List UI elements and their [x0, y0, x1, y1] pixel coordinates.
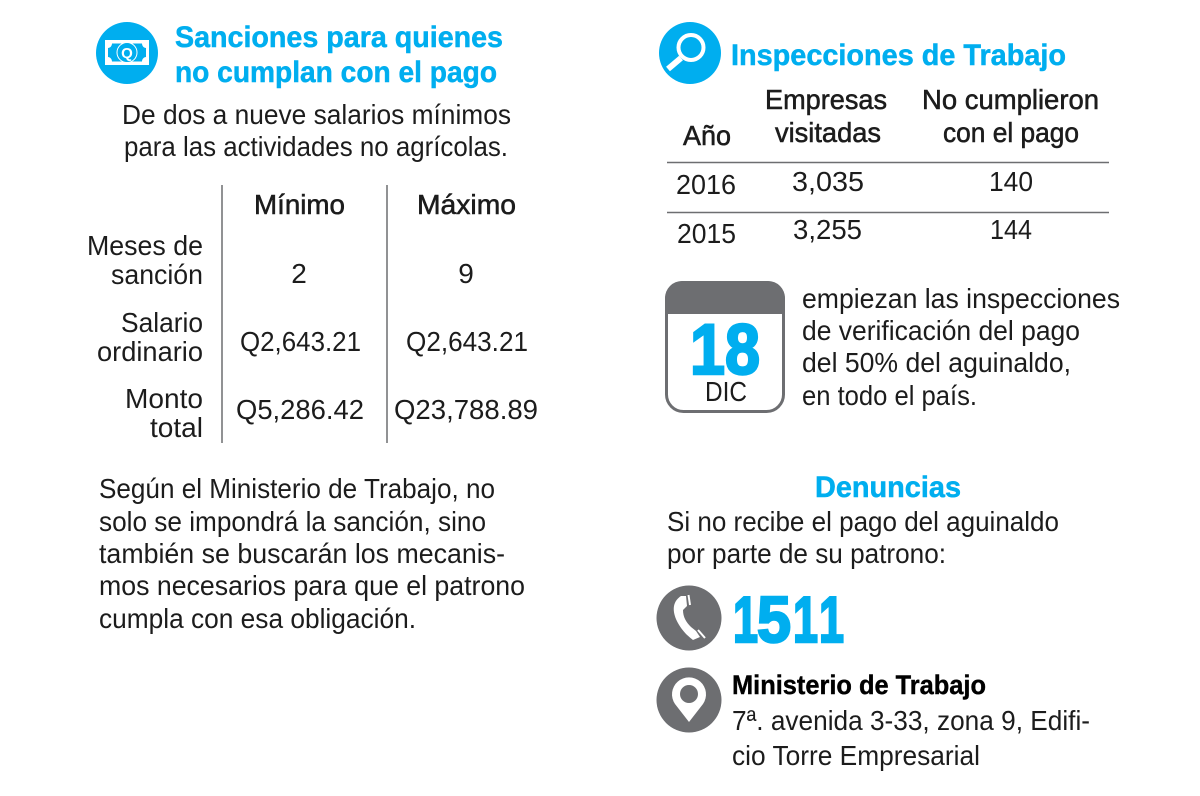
text: ministerio: [99, 473, 525, 634]
text: ministerio: mos necesarios para que el patrono: [99, 570, 525, 601]
text: inspecciones fecha: del 50% del aguinaldo,: [802, 347, 1071, 378]
table: inspecciones: Año: [683, 120, 731, 151]
icon: location pin: [656, 668, 722, 732]
text: denuncias: Si no recibe el pago del aguinaldo: [667, 506, 1059, 537]
table: inspecciones: con el pago: [943, 117, 1079, 148]
heading: denuncias: Denuncias: [815, 471, 961, 504]
table: sanciones: Salario: [121, 307, 203, 338]
table: sanciones: Q5,286.42: [236, 394, 364, 425]
icon: phone: [656, 586, 722, 650]
table: sanciones: Monto: [125, 383, 203, 414]
table: inspecciones: Empresas: [765, 84, 887, 115]
table: inspecciones: 2015: [677, 218, 736, 249]
table: sanciones: total: [150, 412, 203, 443]
table: inspecciones: No cumplieron: [922, 84, 1099, 115]
table: sanciones: sanción: [111, 259, 203, 290]
table: sanciones: 9: [458, 258, 474, 289]
table: sanciones: Q23,788.89: [394, 394, 538, 425]
number: 1511: 1: [793, 583, 818, 656]
table: sanciones: Q2,643.21: [240, 326, 361, 357]
panel: sanciones: [87, 21, 538, 634]
heading: sanciones: Sanciones para quienes: [175, 21, 503, 54]
table: inspecciones: [667, 84, 1109, 249]
heading: sanciones: [175, 21, 503, 89]
table: sanciones: 2: [291, 258, 307, 289]
table: sanciones: ordinario: [97, 336, 203, 367]
table: sanciones: Máximo: [417, 189, 516, 220]
panel: denuncias: [656, 471, 1090, 771]
icon: banknote: [96, 22, 158, 84]
table: sanciones: [87, 185, 538, 443]
number: 1511: 1: [733, 583, 758, 656]
text: direccion: 7ª. avenida 3-33, zona 9, Edifi-: [732, 705, 1090, 736]
text: inspecciones fecha: de verificación del pago: [802, 315, 1080, 346]
text: ministerio: Según el Ministerio de Trabajo, no: [99, 473, 495, 504]
text: intro: [122, 99, 511, 162]
text: inspecciones fecha: en todo el país.: [802, 380, 977, 411]
text: intro: para las actividades no agrícolas.: [124, 131, 508, 162]
text: ministerio: cumpla con esa obligación.: [99, 603, 416, 634]
icon: magnifier: [659, 22, 721, 84]
icon: calendar 18 DIC: DIC: [705, 376, 747, 407]
text: direccion: [732, 670, 1090, 771]
text: ministerio: solo se impondrá la sanción, sino: [99, 506, 486, 537]
heading: inspecciones: Inspecciones de Trabajo: [731, 39, 1066, 72]
table: sanciones: Q2,643.21: [406, 326, 528, 357]
table: inspecciones: 3,255: [793, 214, 862, 245]
table: sanciones: Meses de: [87, 230, 203, 261]
number: 1511: 5: [757, 583, 791, 656]
number: 1511: [733, 583, 844, 656]
icon: calendar 18 DIC: [665, 281, 785, 412]
table: inspecciones: visitadas: [775, 117, 881, 148]
table: inspecciones: 144: [990, 214, 1032, 245]
text: direccion: Ministerio de Trabajo: [732, 670, 986, 700]
panel: inspecciones: [659, 22, 1120, 412]
number: 1511: 1: [819, 583, 844, 656]
text: intro: De dos a nueve salarios mínimos: [122, 99, 511, 130]
text: inspecciones fecha: [802, 283, 1120, 411]
table: inspecciones: 3,035: [792, 166, 864, 197]
text: direccion: cio Torre Empresarial: [732, 740, 980, 771]
table: inspecciones: 140: [989, 166, 1033, 197]
text: ministerio: también se buscarán los mecanis-: [99, 538, 505, 569]
icon: banknote: Q: [121, 45, 133, 62]
table: sanciones: Mínimo: [254, 189, 345, 220]
heading: sanciones: no cumplan con el pago: [175, 56, 497, 89]
icon: calendar 18 DIC: 18: [690, 311, 760, 390]
table: inspecciones: 2016: [676, 169, 736, 200]
text: inspecciones fecha: empiezan las inspecciones: [802, 283, 1120, 314]
text: denuncias: [667, 506, 1059, 569]
text: denuncias: por parte de su patrono:: [667, 538, 946, 569]
